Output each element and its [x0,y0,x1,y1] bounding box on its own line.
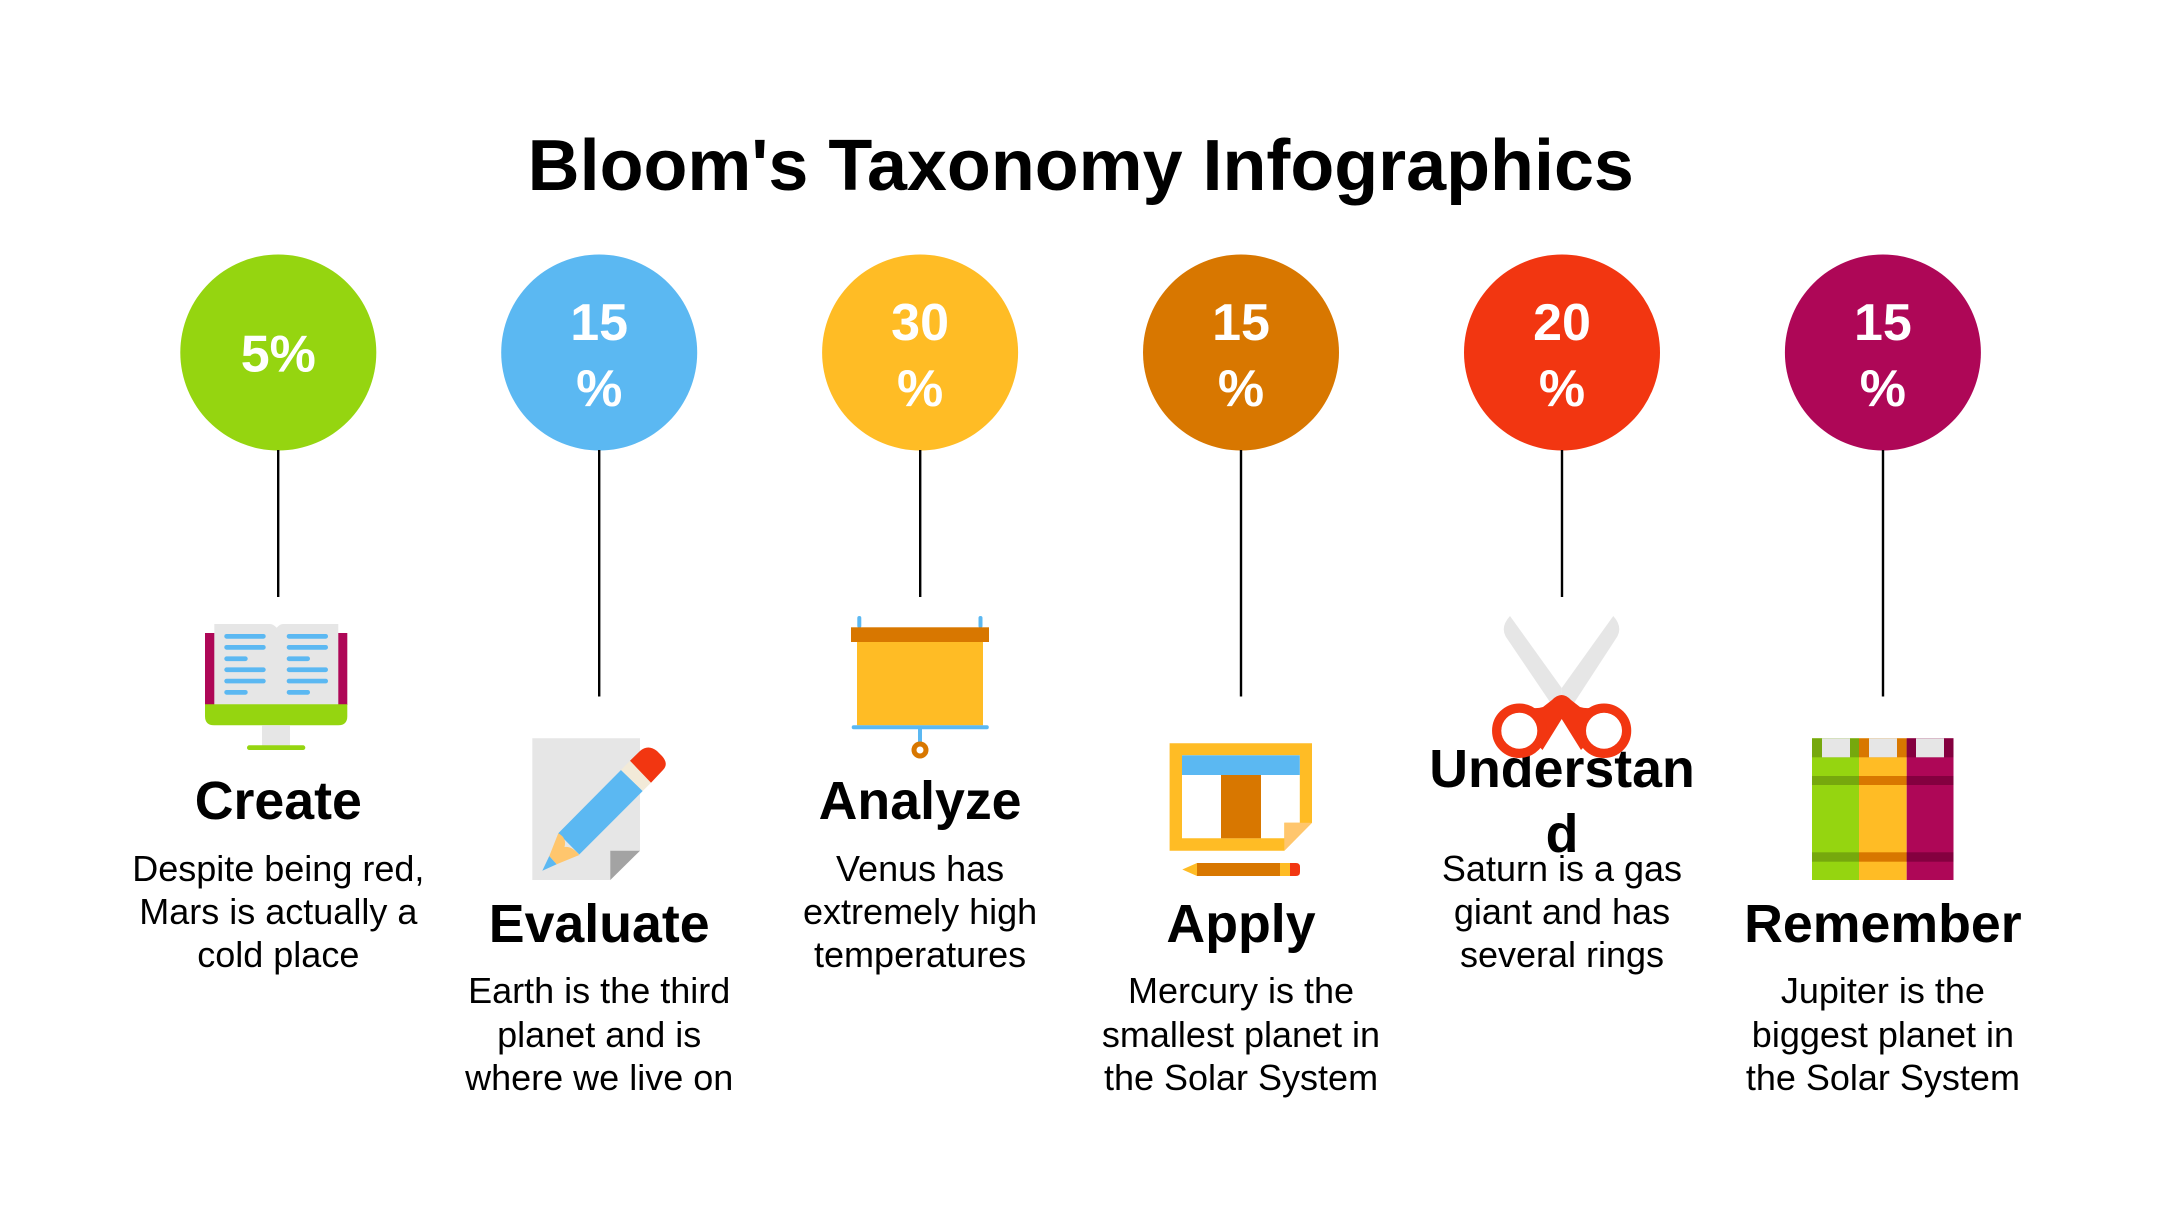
description: Apply: smallest planet in [1102,1014,1380,1055]
description: Analyze: extremely high [803,891,1037,932]
heading: Understand: Understan [1429,739,1695,799]
heading: Apply: Apply [1166,894,1316,954]
percentage circle: 30%: 30 [891,294,949,352]
percentage circle: 30% [822,254,1018,450]
description: Create: Despite being red, [132,848,424,889]
description: Apply: the Solar System [1104,1057,1378,1098]
icon: scissors [1497,616,1626,753]
column: Apply [1102,254,1380,1098]
percentage circle: 15% [501,254,697,450]
icon: books [1812,738,1954,880]
percentage circle: 15%: % [1860,360,1906,418]
icon: paper and pencil [532,738,666,880]
percentage circle: 15% [1785,254,1981,450]
percentage circle: 20% [1464,254,1660,450]
percentage circle: 15%: 15 [1854,294,1912,352]
description: Analyze: Venus has [836,848,1004,889]
icon: book on monitor [205,624,347,750]
description: Understand: several rings [1460,934,1664,975]
connector line [598,450,600,696]
title: Bloom's Taxonomy Infographics [528,126,1634,206]
percentage circle: 20%: 20 [1533,294,1591,352]
connector line [919,450,921,597]
heading: Create: Create [195,771,362,831]
percentage circle: 15%: 15 [1212,294,1270,352]
icon: projector screen [851,616,989,756]
heading: Understand: d [1546,804,1578,864]
description: Apply: Mercury is the [1128,970,1354,1011]
description: Understand: Saturn is a gas [1442,848,1682,889]
connector line [1882,450,1884,696]
column: Create [132,254,424,975]
column: Understand [1429,254,1695,975]
heading: Evaluate: Evaluate [489,894,710,954]
icon: note and pencil [1170,743,1312,876]
percentage circle: 15%: % [576,360,622,418]
description: Remember: biggest planet in [1752,1014,2014,1055]
connector line [277,450,279,597]
connector line [1240,450,1242,696]
description: Remember: Jupiter is the [1781,970,1985,1011]
heading: Remember: Remember [1744,894,2022,954]
description: Remember: the Solar System [1746,1057,2020,1098]
description: Evaluate: where we live on [464,1057,733,1098]
description: Create: cold place [197,934,359,975]
column: Evaluate [464,254,733,1098]
description: Evaluate: planet and is [497,1014,701,1055]
heading: Analyze: Analyze [819,771,1022,831]
percentage circle: 20%: % [1539,360,1585,418]
percentage circle: 15%: % [1218,360,1264,418]
percentage circle: 15%: 15 [570,294,628,352]
description: Understand: giant and has [1454,891,1670,932]
percentage circle: 5%: 5% [241,326,316,384]
connector line [1561,450,1563,597]
column: Analyze [803,254,1037,975]
description: Create: Mars is actually a [139,891,418,932]
percentage circle: 30%: % [897,360,943,418]
description: Analyze: temperatures [814,934,1026,975]
column: Remember [1744,254,2022,1098]
description: Evaluate: Earth is the third [468,970,730,1011]
percentage circle: 15% [1143,254,1339,450]
percentage circle: 5% [180,254,376,450]
